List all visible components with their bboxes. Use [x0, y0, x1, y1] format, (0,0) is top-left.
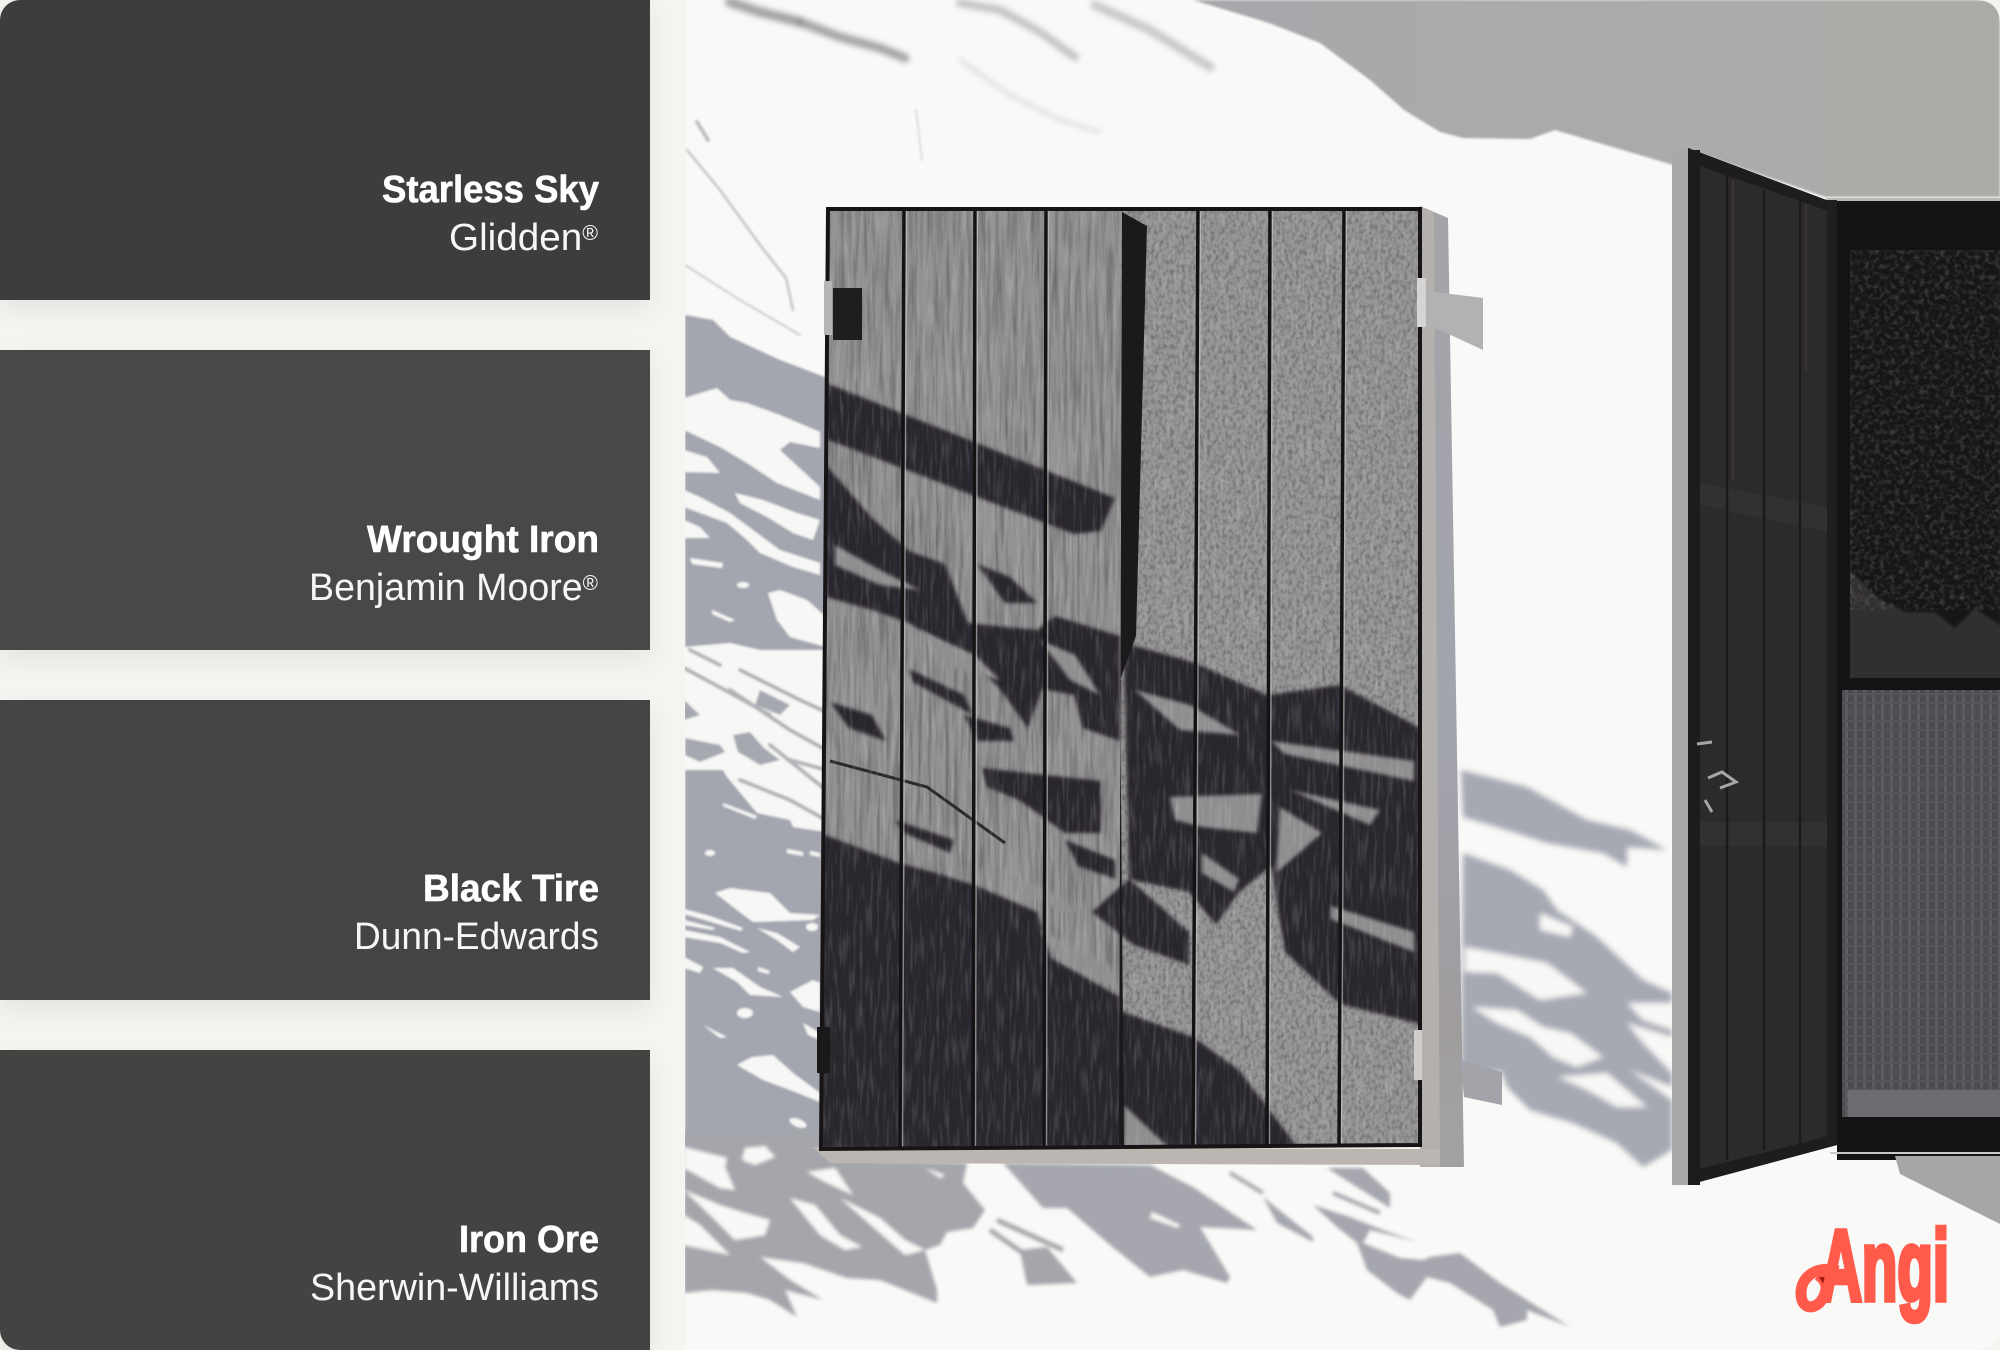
centre wedge shadow — [1119, 212, 1147, 1149]
shutter body — [817, 209, 1426, 1149]
photo: white wall with black shutters and open door — [685, 0, 2000, 1328]
wall leaf shadow: below shutter — [684, 1130, 1570, 1327]
wall background — [685, 0, 2000, 1350]
tree reflection — [1850, 250, 2000, 628]
brand: Benjamin Moore — [309, 567, 586, 609]
color name: Iron Ore — [459, 1219, 599, 1261]
brand: ® — [583, 572, 599, 595]
thin wall branch lines — [685, 110, 922, 335]
panel: Starless Sky swatch — [0, 0, 650, 300]
logo: Angi — [1801, 1210, 1949, 1322]
color name: Wrought Iron — [367, 519, 599, 561]
brand: Dunn-Edwards — [354, 916, 599, 958]
branch shadows at top — [730, 2, 1210, 132]
color name: Black Tire — [423, 868, 599, 910]
color name: Starless Sky — [382, 169, 599, 211]
open door leaf — [1688, 148, 1837, 1185]
window opening — [1826, 198, 2000, 1224]
leaf shadows on shutter — [820, 383, 1420, 1149]
door reveal — [1672, 148, 1688, 1185]
texture over shadows — [821, 209, 1121, 1149]
hinges — [817, 278, 1426, 1080]
top roof shadow — [1193, 0, 2000, 197]
brand: Sherwin-Williams — [310, 1267, 599, 1309]
light gaps between leaf shadows — [835, 545, 1414, 1149]
wall leaf shadow: right of shutter — [1461, 770, 1672, 1167]
brand: ® — [582, 222, 599, 245]
plank gaps — [900, 209, 1344, 1149]
panel: Iron Ore swatch — [0, 1050, 650, 1350]
brand: Glidden — [449, 217, 580, 259]
panel: Black Tire swatch — [0, 700, 650, 1000]
shutter reveal and cast shadow — [812, 206, 1502, 1167]
door handle — [1697, 742, 1736, 812]
panel: Wrought Iron swatch — [0, 350, 650, 650]
wall leaf shadow: left — [684, 315, 830, 1165]
